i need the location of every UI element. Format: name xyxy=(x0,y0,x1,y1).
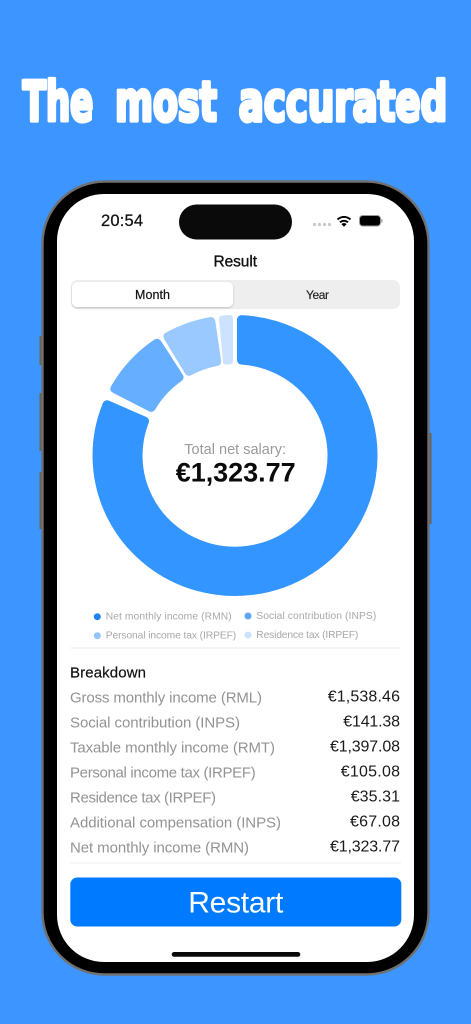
title: The xyxy=(23,71,93,134)
row: social contribution: €141.38 xyxy=(343,714,400,730)
title: most xyxy=(115,71,217,134)
legend item: social contribution: Social contribution (INPS) xyxy=(256,611,376,622)
row: personal income tax: Personal income tax (IRPEF) xyxy=(70,764,256,781)
row: residence tax: Residence tax (IRPEF) xyxy=(70,789,216,806)
breakdown heading: Breakdown xyxy=(70,664,146,681)
row: personal income tax: €105.08 xyxy=(341,764,400,780)
icon: battery xyxy=(360,216,382,226)
row: taxable monthly income: Taxable monthly income (RMT) xyxy=(70,739,275,756)
signal dots xyxy=(313,223,331,226)
selected tab: Month xyxy=(72,282,233,307)
title xyxy=(23,71,447,134)
segment: net monthly income xyxy=(97,320,373,592)
donut centre label: Total net salary: xyxy=(184,442,286,458)
row: social contribution: Social contribution (INPS) xyxy=(70,714,240,731)
row: personal income tax xyxy=(70,764,400,781)
row: taxable monthly income: €1,397.08 xyxy=(330,738,400,756)
row: additional compensation: €67.08 xyxy=(350,814,400,830)
row: gross monthly income: Gross monthly income (RML) xyxy=(70,689,262,706)
phone frame xyxy=(40,182,432,974)
breakdown table xyxy=(70,688,400,856)
row: taxable monthly income xyxy=(70,738,400,756)
row: residence tax xyxy=(70,788,400,806)
dynamic island xyxy=(179,204,292,240)
restart button xyxy=(70,878,401,926)
icon: wifi xyxy=(338,217,350,226)
selected tab: Month: Month xyxy=(135,288,170,302)
row: net monthly income: €1,323.77 xyxy=(330,838,400,856)
legend item: residence tax: Residence tax (IRPEF) xyxy=(256,630,358,641)
tab: Year: Year xyxy=(306,288,329,302)
status bar xyxy=(101,204,382,240)
row: residence tax: €35.31 xyxy=(351,788,400,806)
restart button: Restart xyxy=(188,887,284,920)
legend item: personal income tax: Personal income tax (IRPEF) xyxy=(106,631,236,642)
legend item: net monthly income: Net monthly income (RMN) xyxy=(106,612,232,623)
donut centre label: €1,323.77 xyxy=(176,458,296,488)
row: net monthly income: Net monthly income (RMN) xyxy=(70,839,249,856)
home indicator xyxy=(172,952,300,957)
segment: social contribution xyxy=(115,343,179,407)
legend xyxy=(94,611,376,642)
status time: 20:54 xyxy=(101,212,143,230)
segment: residence tax xyxy=(222,318,230,362)
row: gross monthly income xyxy=(70,688,400,706)
donut centre label xyxy=(176,442,296,488)
segment: personal income tax xyxy=(168,322,217,371)
row: net monthly income xyxy=(70,838,400,856)
donut chart xyxy=(97,318,373,592)
row: gross monthly income: €1,538.46 xyxy=(328,688,400,706)
row: additional compensation: Additional compensation (INPS) xyxy=(70,814,281,831)
row: social contribution xyxy=(70,714,400,731)
screen heading: Result xyxy=(214,254,258,270)
row: additional compensation xyxy=(70,814,400,831)
segmented control xyxy=(71,280,400,309)
